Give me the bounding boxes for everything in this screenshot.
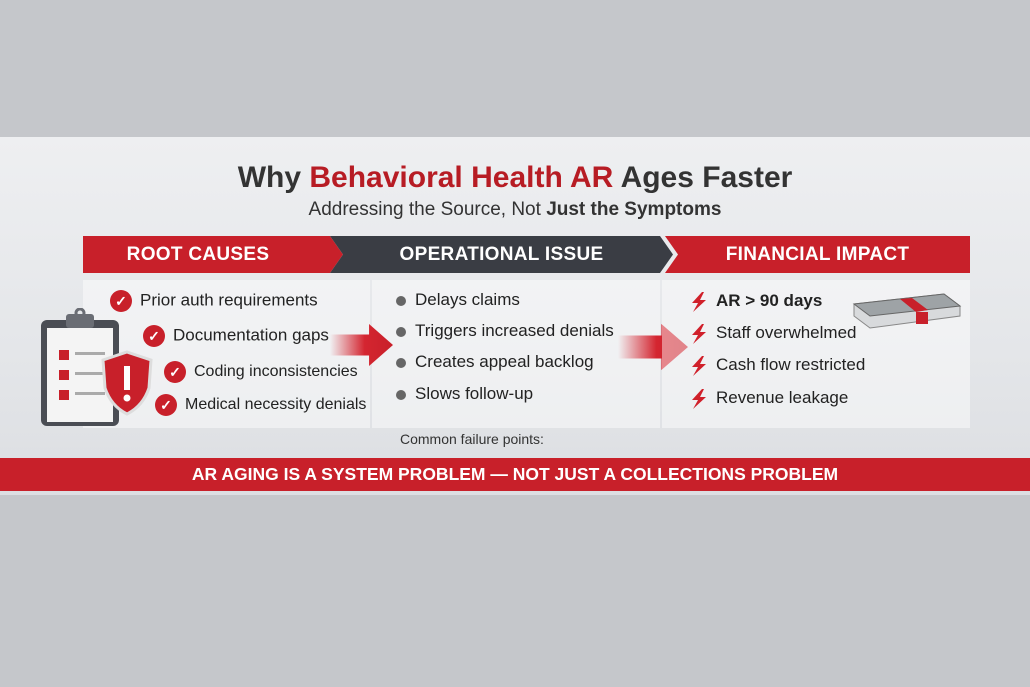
panel: root causes: ✓ — [148, 328, 160, 344]
list: root causes: ✓ — [115, 293, 127, 309]
arrow: operations to impact — [618, 324, 688, 370]
panel: operational issue: Slows follow-up — [415, 384, 533, 403]
panel: root causes: Coding inconsistencies — [194, 363, 358, 380]
title: Why Behavioral Health AR Ages Faster — [238, 161, 792, 194]
panel: operational issue: Triggers increased denials — [415, 321, 614, 340]
header: root causes — [83, 236, 343, 273]
subtitle: Addressing the Source, Not Just the Symptoms — [309, 199, 721, 220]
panel: root causes: Medical necessity denials — [185, 396, 366, 413]
panel: root causes: Documentation gaps — [173, 325, 329, 344]
panel: financial impact: Cash flow restricted — [716, 355, 865, 374]
list: root causes: Prior auth requirements — [140, 290, 318, 309]
header: operational issue — [330, 236, 673, 273]
banner background — [0, 137, 1030, 495]
panel: financial impact: Staff overwhelmed — [716, 323, 856, 342]
icon: clipboard — [41, 308, 152, 426]
bottom banner: AR AGING IS A SYSTEM PROBLEM — NOT JUST A COLLECTIONS PROBLEM — [192, 464, 838, 484]
panel: financial impact — [662, 280, 970, 428]
icon: money stack — [852, 294, 962, 328]
panel: root causes: ✓ — [160, 397, 172, 413]
header: root causes: ROOT CAUSES — [127, 244, 269, 264]
bottom banner — [0, 458, 1030, 491]
header: financial impact — [665, 236, 970, 273]
header: financial impact: FINANCIAL IMPACT — [726, 244, 909, 264]
panel: root causes — [83, 280, 370, 428]
panel: operational issue — [372, 280, 660, 428]
panel: financial impact: Revenue leakage — [716, 388, 848, 407]
panel: operational issue: Delays claims — [415, 290, 520, 309]
panel: operational issue: Creates appeal backlog — [415, 352, 594, 371]
caption: common failure points: Common failure points: — [400, 431, 544, 447]
panel: root causes: ✓ — [169, 364, 181, 380]
header: operational issue: OPERATIONAL ISSUE — [400, 244, 603, 264]
panel: financial impact: AR > 90 days — [716, 291, 822, 310]
arrow: causes to operations — [330, 324, 393, 366]
